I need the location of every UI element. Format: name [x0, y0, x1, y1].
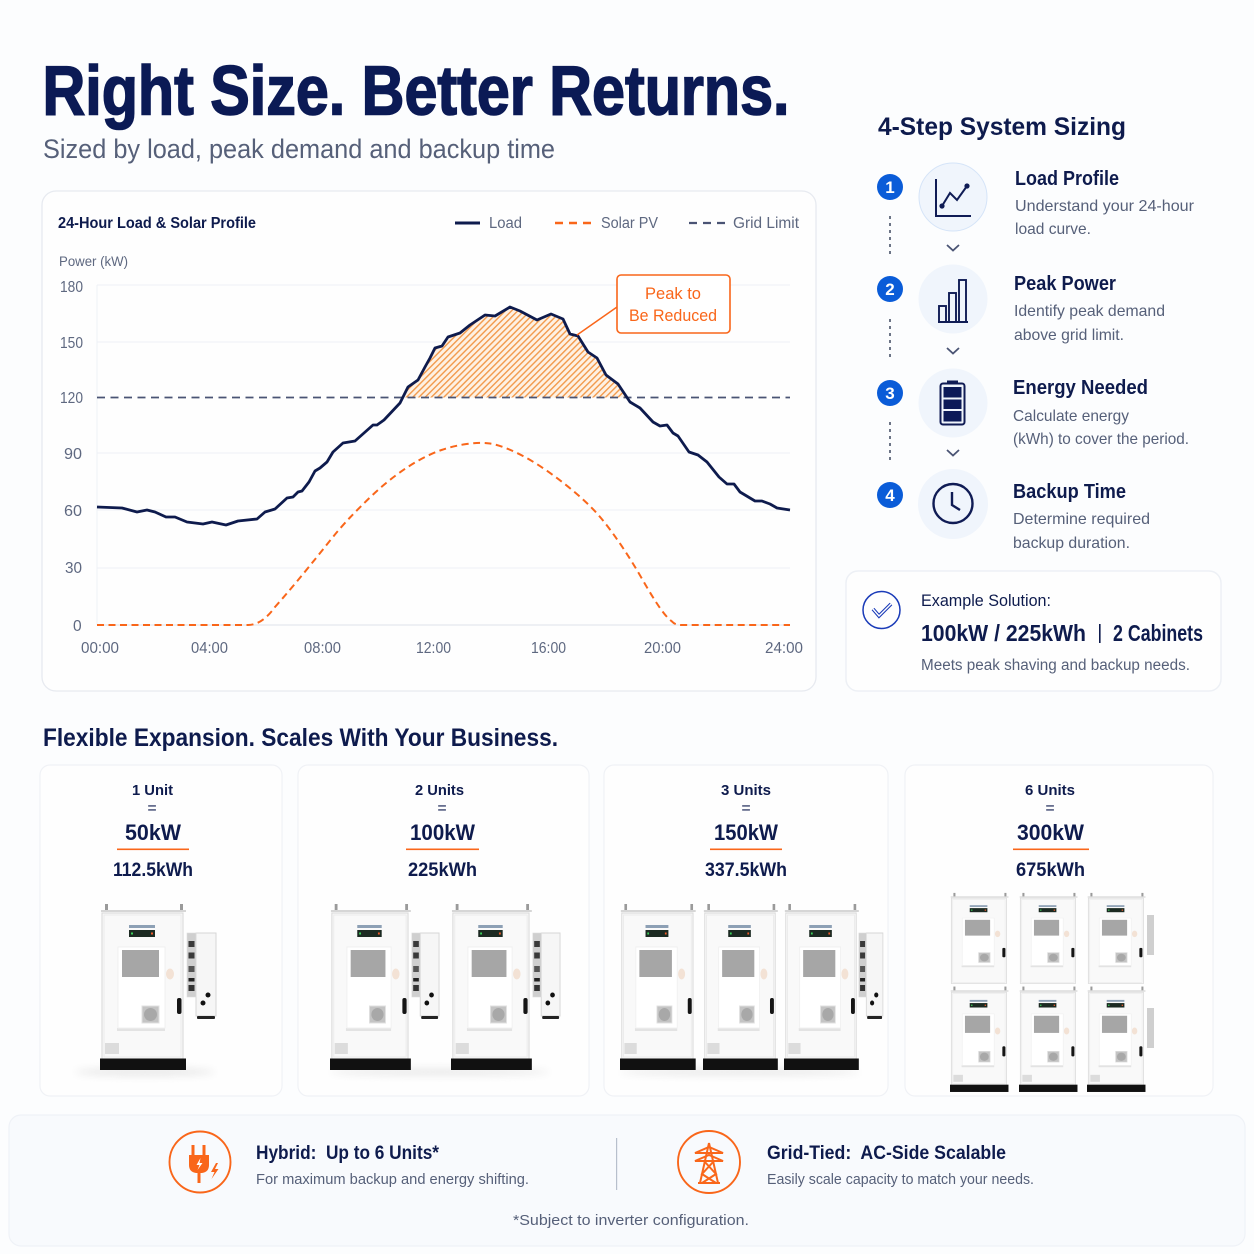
- grid-tied text: Easily scale capacity to match your needs.: [767, 1172, 1034, 1188]
- chart heading: 24-Hour Load & Solar Profile: [58, 215, 256, 232]
- panel: 3 units: [604, 765, 888, 1096]
- step 2: peak power: Peak Power: [1014, 273, 1116, 295]
- step 1: load profile: Understand your 24-hour: [1015, 198, 1195, 215]
- x axis labels: 04:00: [191, 640, 228, 657]
- cabinet illustrations: [620, 904, 883, 1076]
- step 3: energy needed: Energy Needed: [1013, 377, 1148, 399]
- y axis labels: 120: [60, 390, 83, 407]
- section heading: flexible expansion: Flexible Expansion. Scales With Your Business.: [43, 724, 558, 752]
- y axis labels: 90: [64, 446, 82, 463]
- panel: 3 units: 3 Units: [721, 782, 771, 799]
- step 3: energy needed: 3: [885, 384, 895, 403]
- legend: Load: [489, 215, 522, 232]
- hybrid text: [256, 1143, 529, 1188]
- y axis title: Power (kW): [59, 254, 128, 269]
- step 4: backup time: Backup Time: [1013, 481, 1126, 503]
- x axis labels: 24:00: [765, 640, 803, 657]
- step 1: load profile: 1: [885, 178, 895, 197]
- hybrid text: For maximum backup and energy shifting.: [256, 1172, 529, 1188]
- step 2: peak power: [877, 264, 1165, 359]
- hybrid text: Hybrid: Up to 6 Units*: [256, 1143, 440, 1164]
- icon: check circle: [863, 592, 900, 628]
- solar pv curve: [97, 443, 790, 625]
- cabinet illustrations: [950, 893, 1154, 1092]
- y axis labels: 0: [73, 618, 82, 635]
- step 1: load profile: load curve.: [1015, 221, 1091, 238]
- icon: transmission tower: [678, 1131, 740, 1193]
- x axis labels: [81, 640, 803, 657]
- panel: example solution: Example Solution:: [921, 592, 1051, 610]
- icon: plug: [170, 1132, 230, 1192]
- x axis labels: 12:00: [416, 640, 451, 657]
- step 3: energy needed: Calculate energy: [1013, 408, 1129, 425]
- step 1: load profile: [877, 163, 1195, 256]
- panel: 6 units: 300kW: [1017, 820, 1084, 845]
- panel: 24-hour chart: [42, 191, 816, 691]
- step 2: peak power: above grid limit.: [1014, 327, 1124, 344]
- icon: line chart: [936, 179, 971, 216]
- panel: 1 unit: 112.5kWh: [113, 860, 193, 881]
- panel: 3 units: 337.5kWh: [705, 860, 787, 881]
- y axis labels: 60: [64, 503, 82, 520]
- panel: 6 units: [905, 765, 1213, 1096]
- panel: 6 units: 675kWh: [1016, 860, 1085, 881]
- grid-tied text: [767, 1143, 1034, 1188]
- panel: 1 unit: =: [147, 800, 157, 817]
- step 4: backup time: Determine required: [1013, 511, 1150, 528]
- step 3: energy needed: [877, 368, 1189, 462]
- panel: 2 units: 100kW: [410, 820, 475, 845]
- step 1: load profile: Load Profile: [1015, 168, 1119, 190]
- panel: example solution: [846, 571, 1221, 691]
- hatched peak area: [405, 307, 626, 398]
- callout: peak to be reduced: Be Reduced: [629, 307, 717, 325]
- step 4: backup time: backup duration.: [1013, 535, 1130, 552]
- panel: example solution: 100kW / 225kWh: [921, 620, 1086, 646]
- grid-tied text: Grid-Tied: AC-Side Scalable: [767, 1143, 1006, 1164]
- panel: example solution: Meets peak shaving and backup needs.: [921, 657, 1190, 674]
- x axis labels: 08:00: [304, 640, 341, 657]
- y axis labels: 180: [60, 279, 83, 296]
- icon: clock: [934, 484, 972, 523]
- panel: deployment options: [9, 1115, 1245, 1246]
- panel: 1 unit: [40, 765, 282, 1096]
- panel: 2 units: 225kWh: [408, 860, 477, 881]
- legend: [455, 215, 800, 232]
- subtitle: Sized by load, peak demand and backup time: [43, 134, 555, 164]
- grid limit line: [97, 396, 790, 398]
- legend: Grid Limit: [733, 215, 800, 232]
- load curve: [97, 307, 790, 525]
- y axis labels: 30: [65, 560, 82, 577]
- step 2: peak power: Identify peak demand: [1014, 303, 1165, 320]
- step 4: backup time: 4: [885, 486, 895, 505]
- x axis labels: 20:00: [644, 640, 681, 657]
- panel: 2 units: =: [437, 800, 447, 817]
- panel: 2 units: 2 Units: [415, 782, 464, 799]
- cabinet illustration: [75, 904, 216, 1076]
- callout: peak to be reduced: [577, 275, 730, 335]
- step 4: backup time: [877, 469, 1150, 552]
- cabinet illustrations: [330, 904, 560, 1076]
- title: Right Size. Better Returns.: [42, 52, 790, 130]
- panel: 3 units: =: [741, 800, 751, 817]
- panel: 6 units: =: [1045, 800, 1055, 817]
- footnote: *Subject to inverter configuration.: [513, 1212, 749, 1229]
- x axis labels: 00:00: [81, 640, 119, 657]
- panel: 6 units: 6 Units: [1025, 782, 1075, 799]
- x axis labels: 16:00: [531, 640, 566, 657]
- grid and axes: [97, 285, 790, 625]
- step 3: energy needed: (kWh) to cover the period.: [1013, 431, 1189, 448]
- panel: 2 units: [298, 765, 589, 1096]
- icon: bar chart: [938, 280, 968, 322]
- step 2: peak power: 2: [885, 280, 895, 299]
- heading: 4-step system sizing: 4-Step System Sizing: [878, 113, 1126, 141]
- y axis labels: 150: [60, 335, 83, 352]
- panel: example solution: 2 Cabinets: [1113, 620, 1203, 646]
- panel: 3 units: 150kW: [714, 820, 778, 845]
- callout: peak to be reduced: Peak to: [645, 285, 701, 303]
- legend: Solar PV: [601, 215, 659, 232]
- icon: battery: [940, 380, 964, 424]
- y axis labels: [60, 279, 83, 635]
- panel: 1 unit: 50kW: [125, 820, 181, 845]
- panel: 1 unit: 1 Unit: [132, 782, 173, 799]
